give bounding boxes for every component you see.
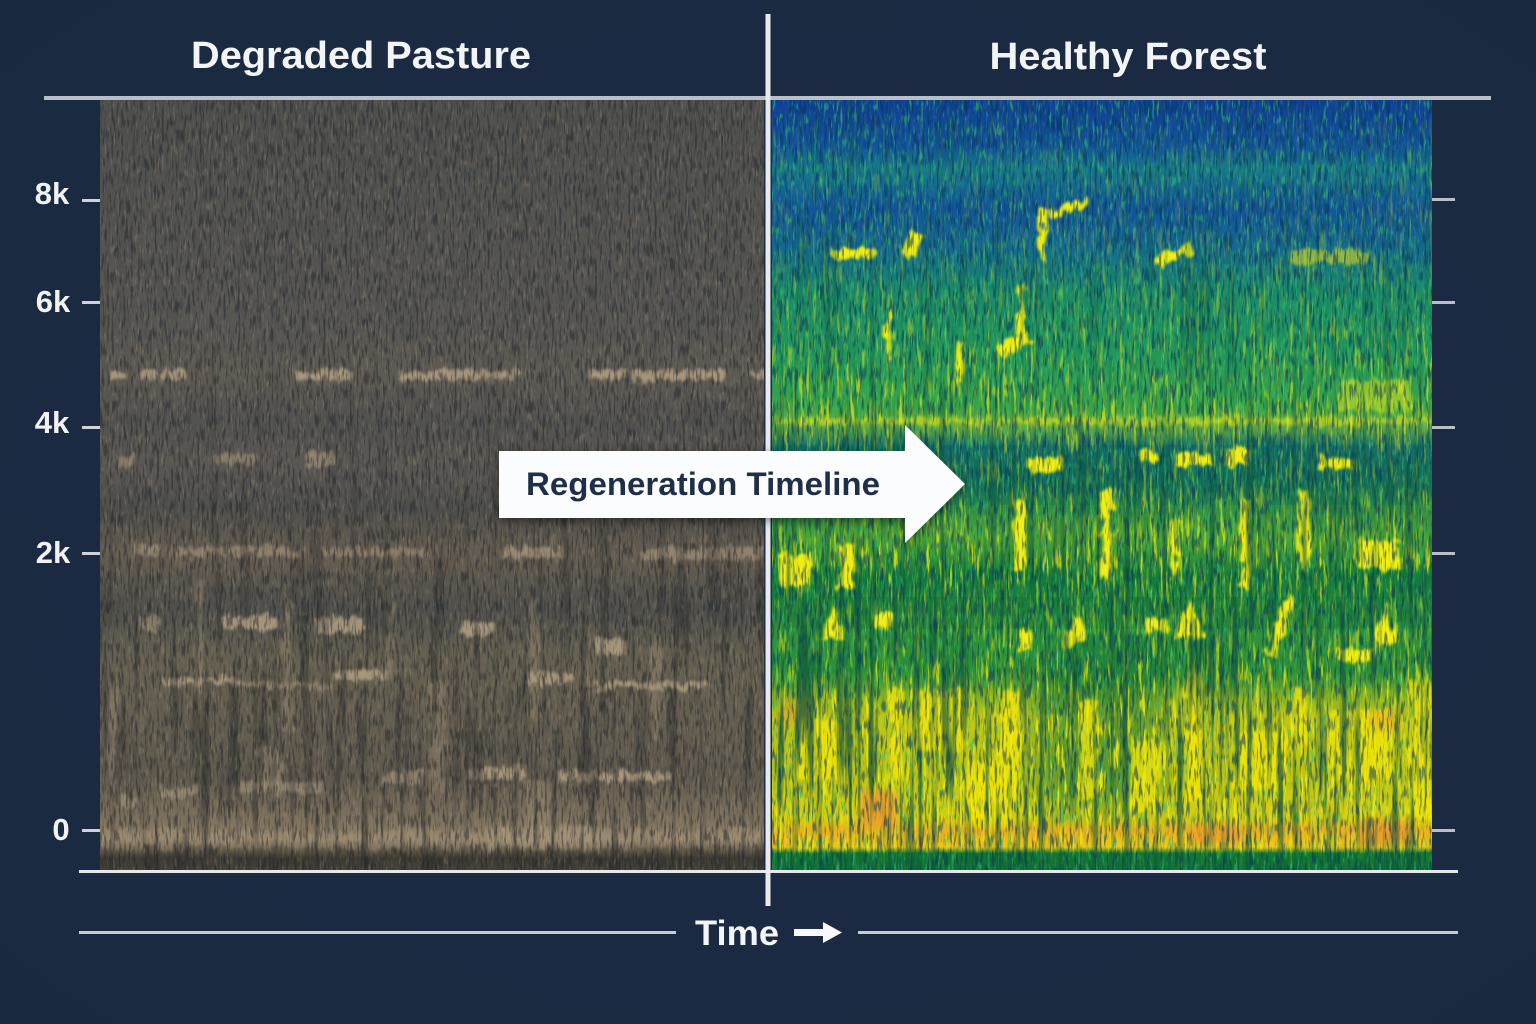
panel: healthy forest spectrogram xyxy=(772,100,1432,870)
y axis ticks, right xyxy=(1432,198,1455,832)
heading: Healthy Forest: Healthy Forest xyxy=(990,36,1267,78)
y axis labels and ticks, left: 2k xyxy=(36,535,71,570)
grain: teal speckle xyxy=(772,100,1432,870)
arrow: Regeneration Timeline: Regeneration Timeline xyxy=(526,466,880,502)
panel: degraded pasture spectrogram xyxy=(100,100,764,870)
bottom rule xyxy=(79,870,1458,873)
heading: Degraded Pasture: Degraded Pasture xyxy=(191,35,531,77)
time axis: Time xyxy=(695,914,779,953)
arrow: Regeneration Timeline xyxy=(499,425,965,543)
y axis labels and ticks, left xyxy=(35,176,100,847)
top rule xyxy=(44,96,1491,100)
icon: time arrow xyxy=(794,922,842,943)
y axis labels and ticks, left: 0 xyxy=(52,812,70,847)
center divider xyxy=(766,14,770,906)
y axis labels and ticks, left: 4k xyxy=(35,405,70,440)
y axis labels and ticks, left: 8k xyxy=(35,176,70,211)
time axis xyxy=(79,914,1458,953)
y axis labels and ticks, left: 6k xyxy=(36,284,71,319)
